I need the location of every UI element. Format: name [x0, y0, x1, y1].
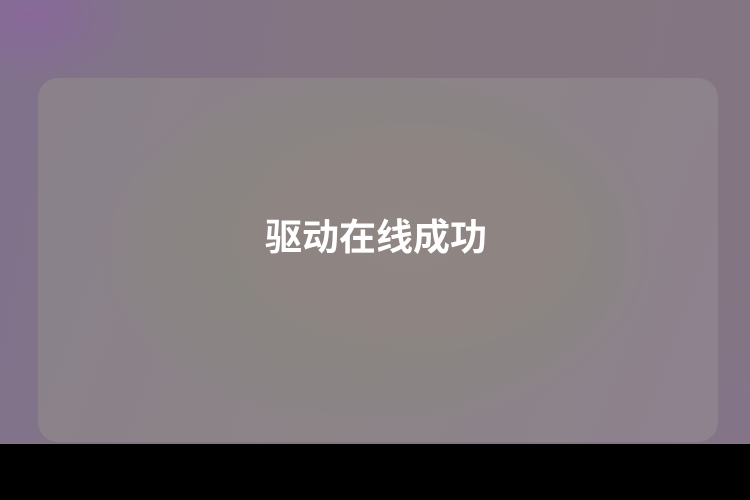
bottom black band	[0, 444, 750, 500]
panel: central card	[38, 78, 718, 442]
title: 驱动在线成功	[265, 217, 487, 258]
